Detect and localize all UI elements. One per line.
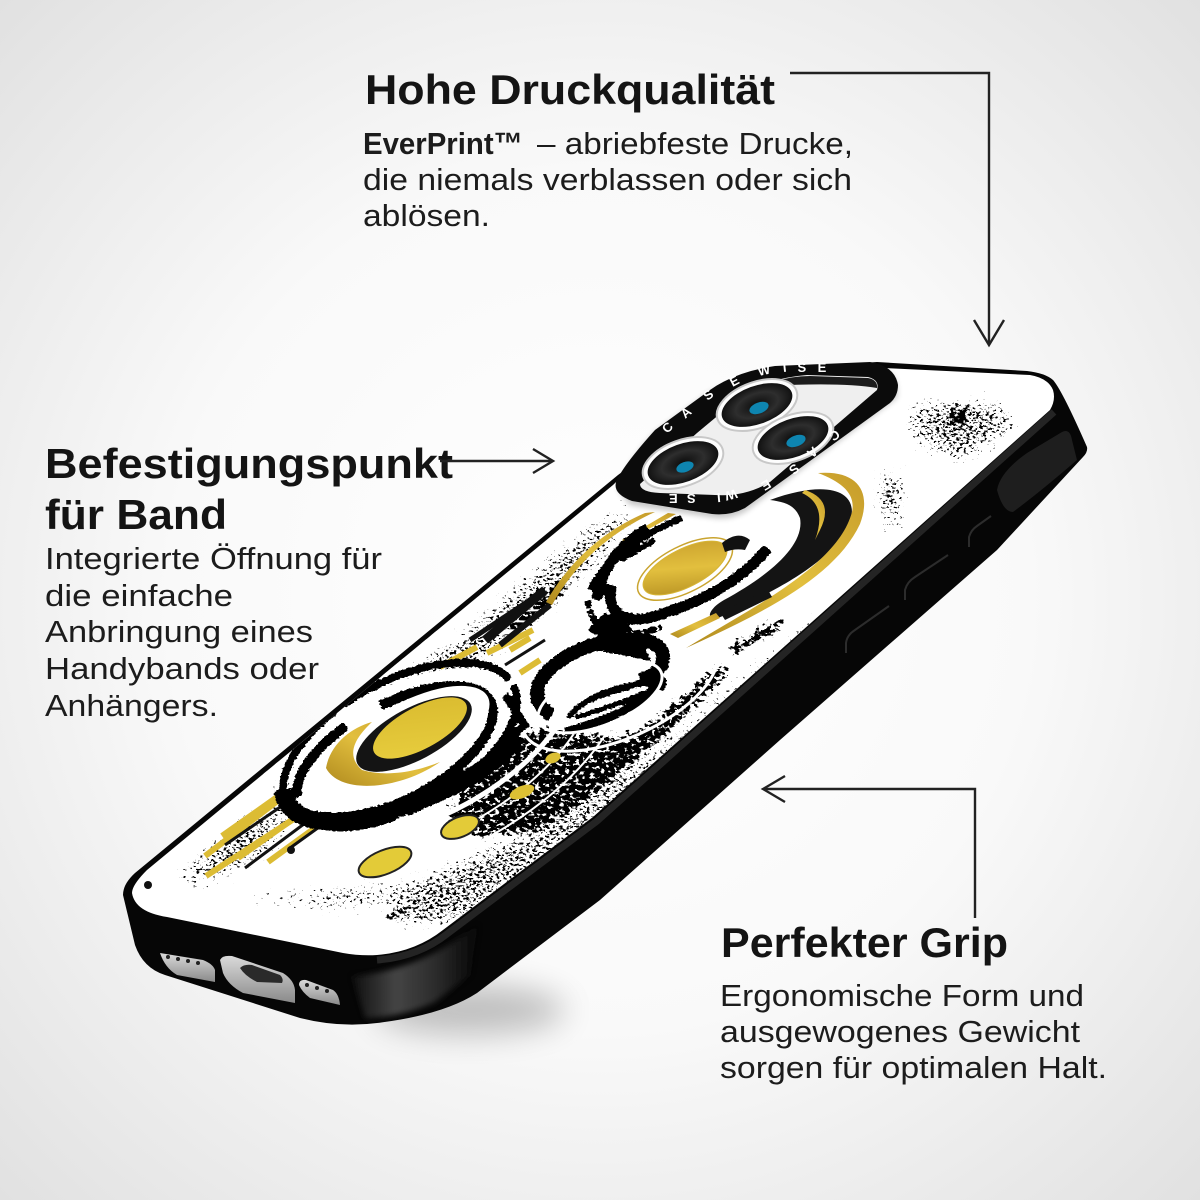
brand text bottom: CASEWISE: [669, 427, 843, 506]
heading: für Band: [45, 491, 227, 538]
printed artwork: [144, 395, 1030, 935]
lower gold sweep: [670, 613, 720, 638]
feature: grip: [720, 919, 1107, 1085]
black stripes: [225, 590, 550, 868]
bump shadow: [618, 366, 897, 518]
lens left: [636, 427, 730, 499]
inner gold arc: [802, 490, 825, 540]
gold stripes: [205, 630, 540, 876]
gold ring: [636, 537, 734, 601]
bottom ports: [160, 953, 340, 1005]
description: [45, 541, 382, 723]
side buttons: [846, 516, 991, 653]
gold long streak: [546, 512, 655, 605]
bottom swirl: [273, 658, 530, 832]
arrow: grip: [763, 776, 975, 918]
description: die einfache: [45, 578, 233, 613]
heading: Hohe Druckqualität: [365, 66, 775, 113]
arrow: print quality: [790, 73, 1004, 345]
left speaker: [160, 953, 215, 982]
description: Anhängers.: [45, 688, 218, 723]
gold centre: [642, 540, 728, 596]
description: Anbringung eines: [45, 614, 313, 649]
swirl white base: [580, 487, 800, 663]
speckle: dense dark patches: [378, 403, 975, 924]
description: [720, 978, 1107, 1085]
arrow: strap attachment: [440, 449, 553, 473]
case body: [123, 362, 1087, 1025]
brand text top: CASEWISE: [659, 360, 827, 436]
phone drop shadow: [375, 986, 565, 1034]
description: – abriebfeste Drucke,: [537, 126, 853, 161]
rough black rings: [273, 658, 530, 832]
lens upper: [710, 369, 804, 441]
heading: [45, 440, 453, 538]
usb slot: [240, 965, 283, 983]
black centre edge: [356, 696, 472, 772]
upper ring: [537, 639, 663, 732]
bottom corner highlight: [352, 925, 478, 1018]
inner white: [392, 686, 490, 711]
white contour: [537, 664, 664, 734]
back white surface: [132, 368, 1054, 955]
lens right: [746, 402, 840, 474]
black stroke end: [722, 592, 772, 620]
window inner shade: [760, 376, 877, 388]
description: EverPrint™: [363, 126, 523, 161]
rough black rings: [588, 518, 768, 640]
heading: Perfekter Grip: [721, 919, 1008, 966]
speaker holes: [166, 955, 329, 993]
feature: print quality: [363, 66, 853, 233]
dark gold crescent: [326, 722, 440, 786]
white base: [288, 668, 482, 813]
white arcs over dark area: [254, 609, 717, 850]
description: ablösen.: [363, 198, 490, 233]
bump ring: [616, 362, 898, 514]
right speaker: [299, 980, 340, 1005]
middle swirl: [530, 632, 670, 736]
gold centre: [373, 697, 467, 759]
description: Ergonomische Form und: [720, 978, 1084, 1013]
side bump: [997, 431, 1077, 512]
description: ausgewogenes Gewicht: [720, 1014, 1080, 1049]
white base: [547, 725, 566, 731]
gold thin streak: [622, 513, 676, 542]
usb port: [220, 956, 295, 1003]
heading: Befestigungspunkt: [45, 440, 453, 487]
top swirl: [546, 473, 864, 663]
camera bump: [616, 360, 898, 518]
centre black accent: [722, 536, 750, 552]
description: die niemals verblassen oder sich: [363, 162, 852, 197]
phone case: [123, 360, 1087, 1025]
feature: strap attachment: [45, 440, 453, 723]
black crescent: [710, 489, 852, 618]
rim band: [377, 412, 1054, 960]
description: sorgen für optimalen Halt.: [720, 1050, 1107, 1085]
camera window: [640, 375, 878, 495]
stray dots: [144, 846, 295, 889]
gold dots: [355, 750, 562, 884]
description: Integrierte Öffnung für: [45, 541, 382, 576]
description: [363, 126, 853, 233]
speckle: wide fields: [165, 395, 1030, 935]
gold crescent: [686, 473, 864, 648]
description: Handybands oder: [45, 651, 319, 686]
